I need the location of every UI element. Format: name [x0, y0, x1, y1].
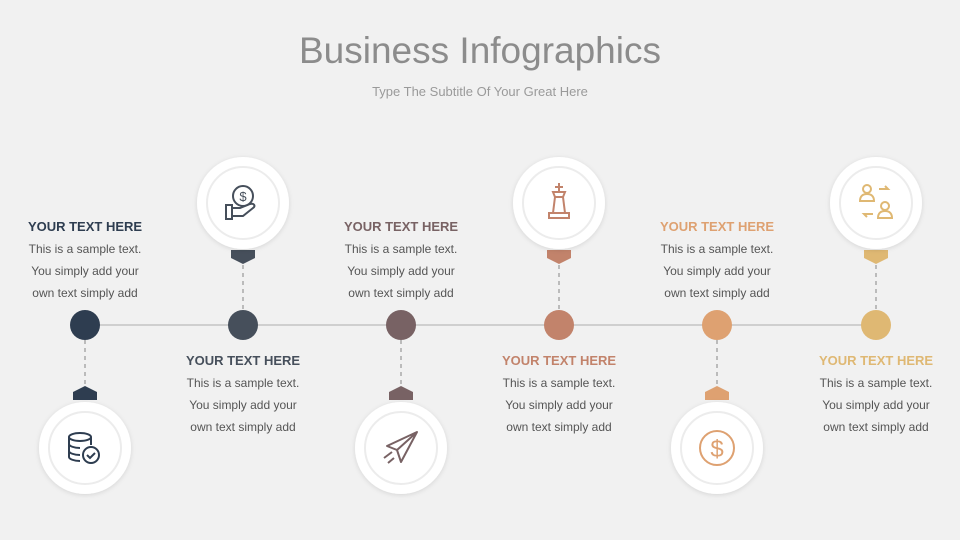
step 4: You simply add your	[505, 398, 613, 412]
step 5: own text simply add	[664, 286, 770, 300]
step 2: own text simply add	[190, 420, 296, 434]
step 5	[660, 219, 774, 494]
step 3: YOUR TEXT HERE	[344, 219, 458, 234]
title: Business Infographics	[299, 30, 661, 71]
step 1: own text simply add	[32, 286, 138, 300]
step 1	[28, 219, 142, 494]
icon: people exchange	[860, 185, 892, 218]
step 3	[344, 219, 458, 494]
step 3: You simply add your	[347, 264, 455, 278]
step 4	[502, 157, 616, 434]
icon: chess king	[549, 183, 569, 218]
step 2: This is a sample text.	[187, 376, 299, 390]
icon: hand coin: $	[239, 189, 247, 204]
icon: paper plane	[384, 432, 417, 463]
step 1: You simply add your	[31, 264, 139, 278]
icon: hand coin	[226, 186, 254, 219]
step 5: YOUR TEXT HERE	[660, 219, 774, 234]
step 4: YOUR TEXT HERE	[502, 353, 616, 368]
icon: dollar coin: $	[710, 436, 724, 463]
icon: database check	[69, 433, 99, 463]
step 6: This is a sample text.	[820, 376, 932, 390]
step 6: YOUR TEXT HERE	[819, 353, 933, 368]
step 6	[819, 157, 933, 434]
step 5: You simply add your	[663, 264, 771, 278]
icon: dollar coin	[700, 431, 734, 465]
step 6: You simply add your	[822, 398, 930, 412]
step 4: own text simply add	[506, 420, 612, 434]
step 6: own text simply add	[823, 420, 929, 434]
step 3: This is a sample text.	[345, 242, 457, 256]
step 1: YOUR TEXT HERE	[28, 219, 142, 234]
step 2	[186, 157, 300, 434]
step 2: YOUR TEXT HERE	[186, 353, 300, 368]
step 3: own text simply add	[348, 286, 454, 300]
step 4: This is a sample text.	[503, 376, 615, 390]
timeline line	[85, 324, 876, 326]
step 2: You simply add your	[189, 398, 297, 412]
step 1: This is a sample text.	[29, 242, 141, 256]
step 5: This is a sample text.	[661, 242, 773, 256]
subtitle: Type The Subtitle Of Your Great Here	[372, 84, 588, 99]
